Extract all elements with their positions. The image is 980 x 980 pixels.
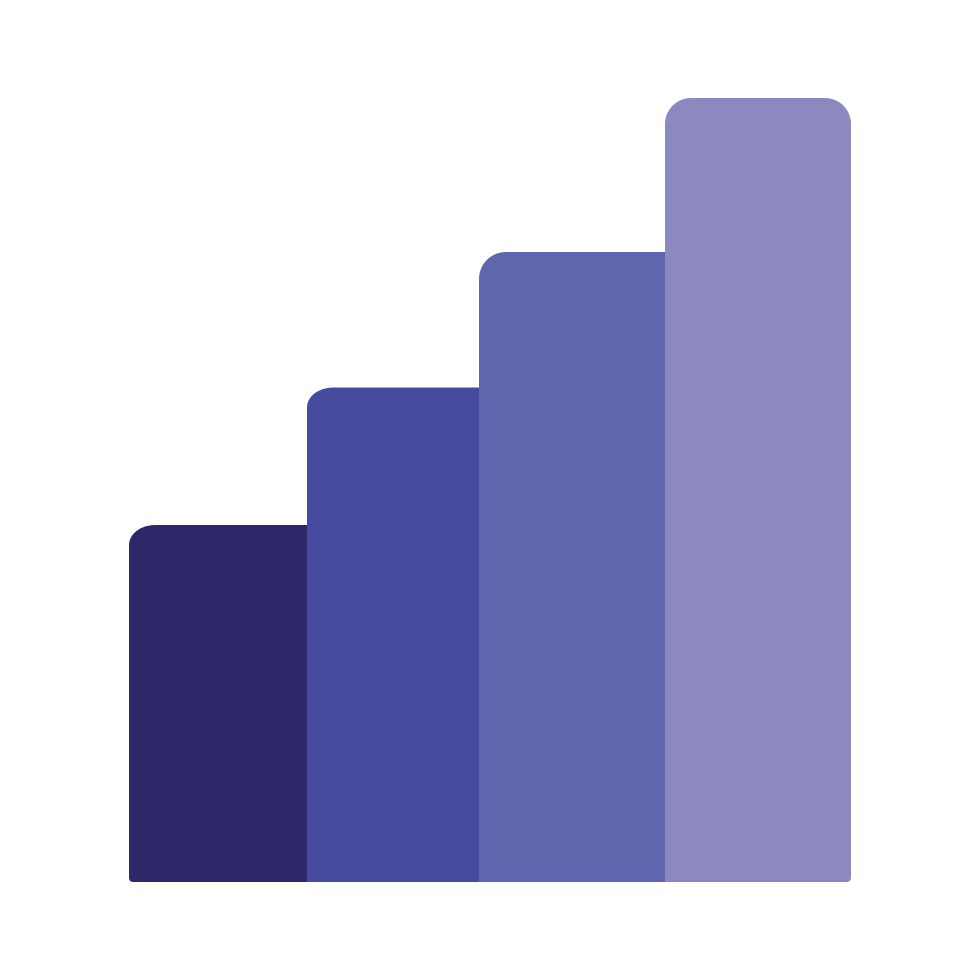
bar 1: darkest, shortest (129, 525, 307, 882)
bar 2: indigo (307, 388, 479, 882)
bar 4: lightest, tallest (665, 98, 851, 882)
bar 3: medium blue (479, 252, 665, 882)
